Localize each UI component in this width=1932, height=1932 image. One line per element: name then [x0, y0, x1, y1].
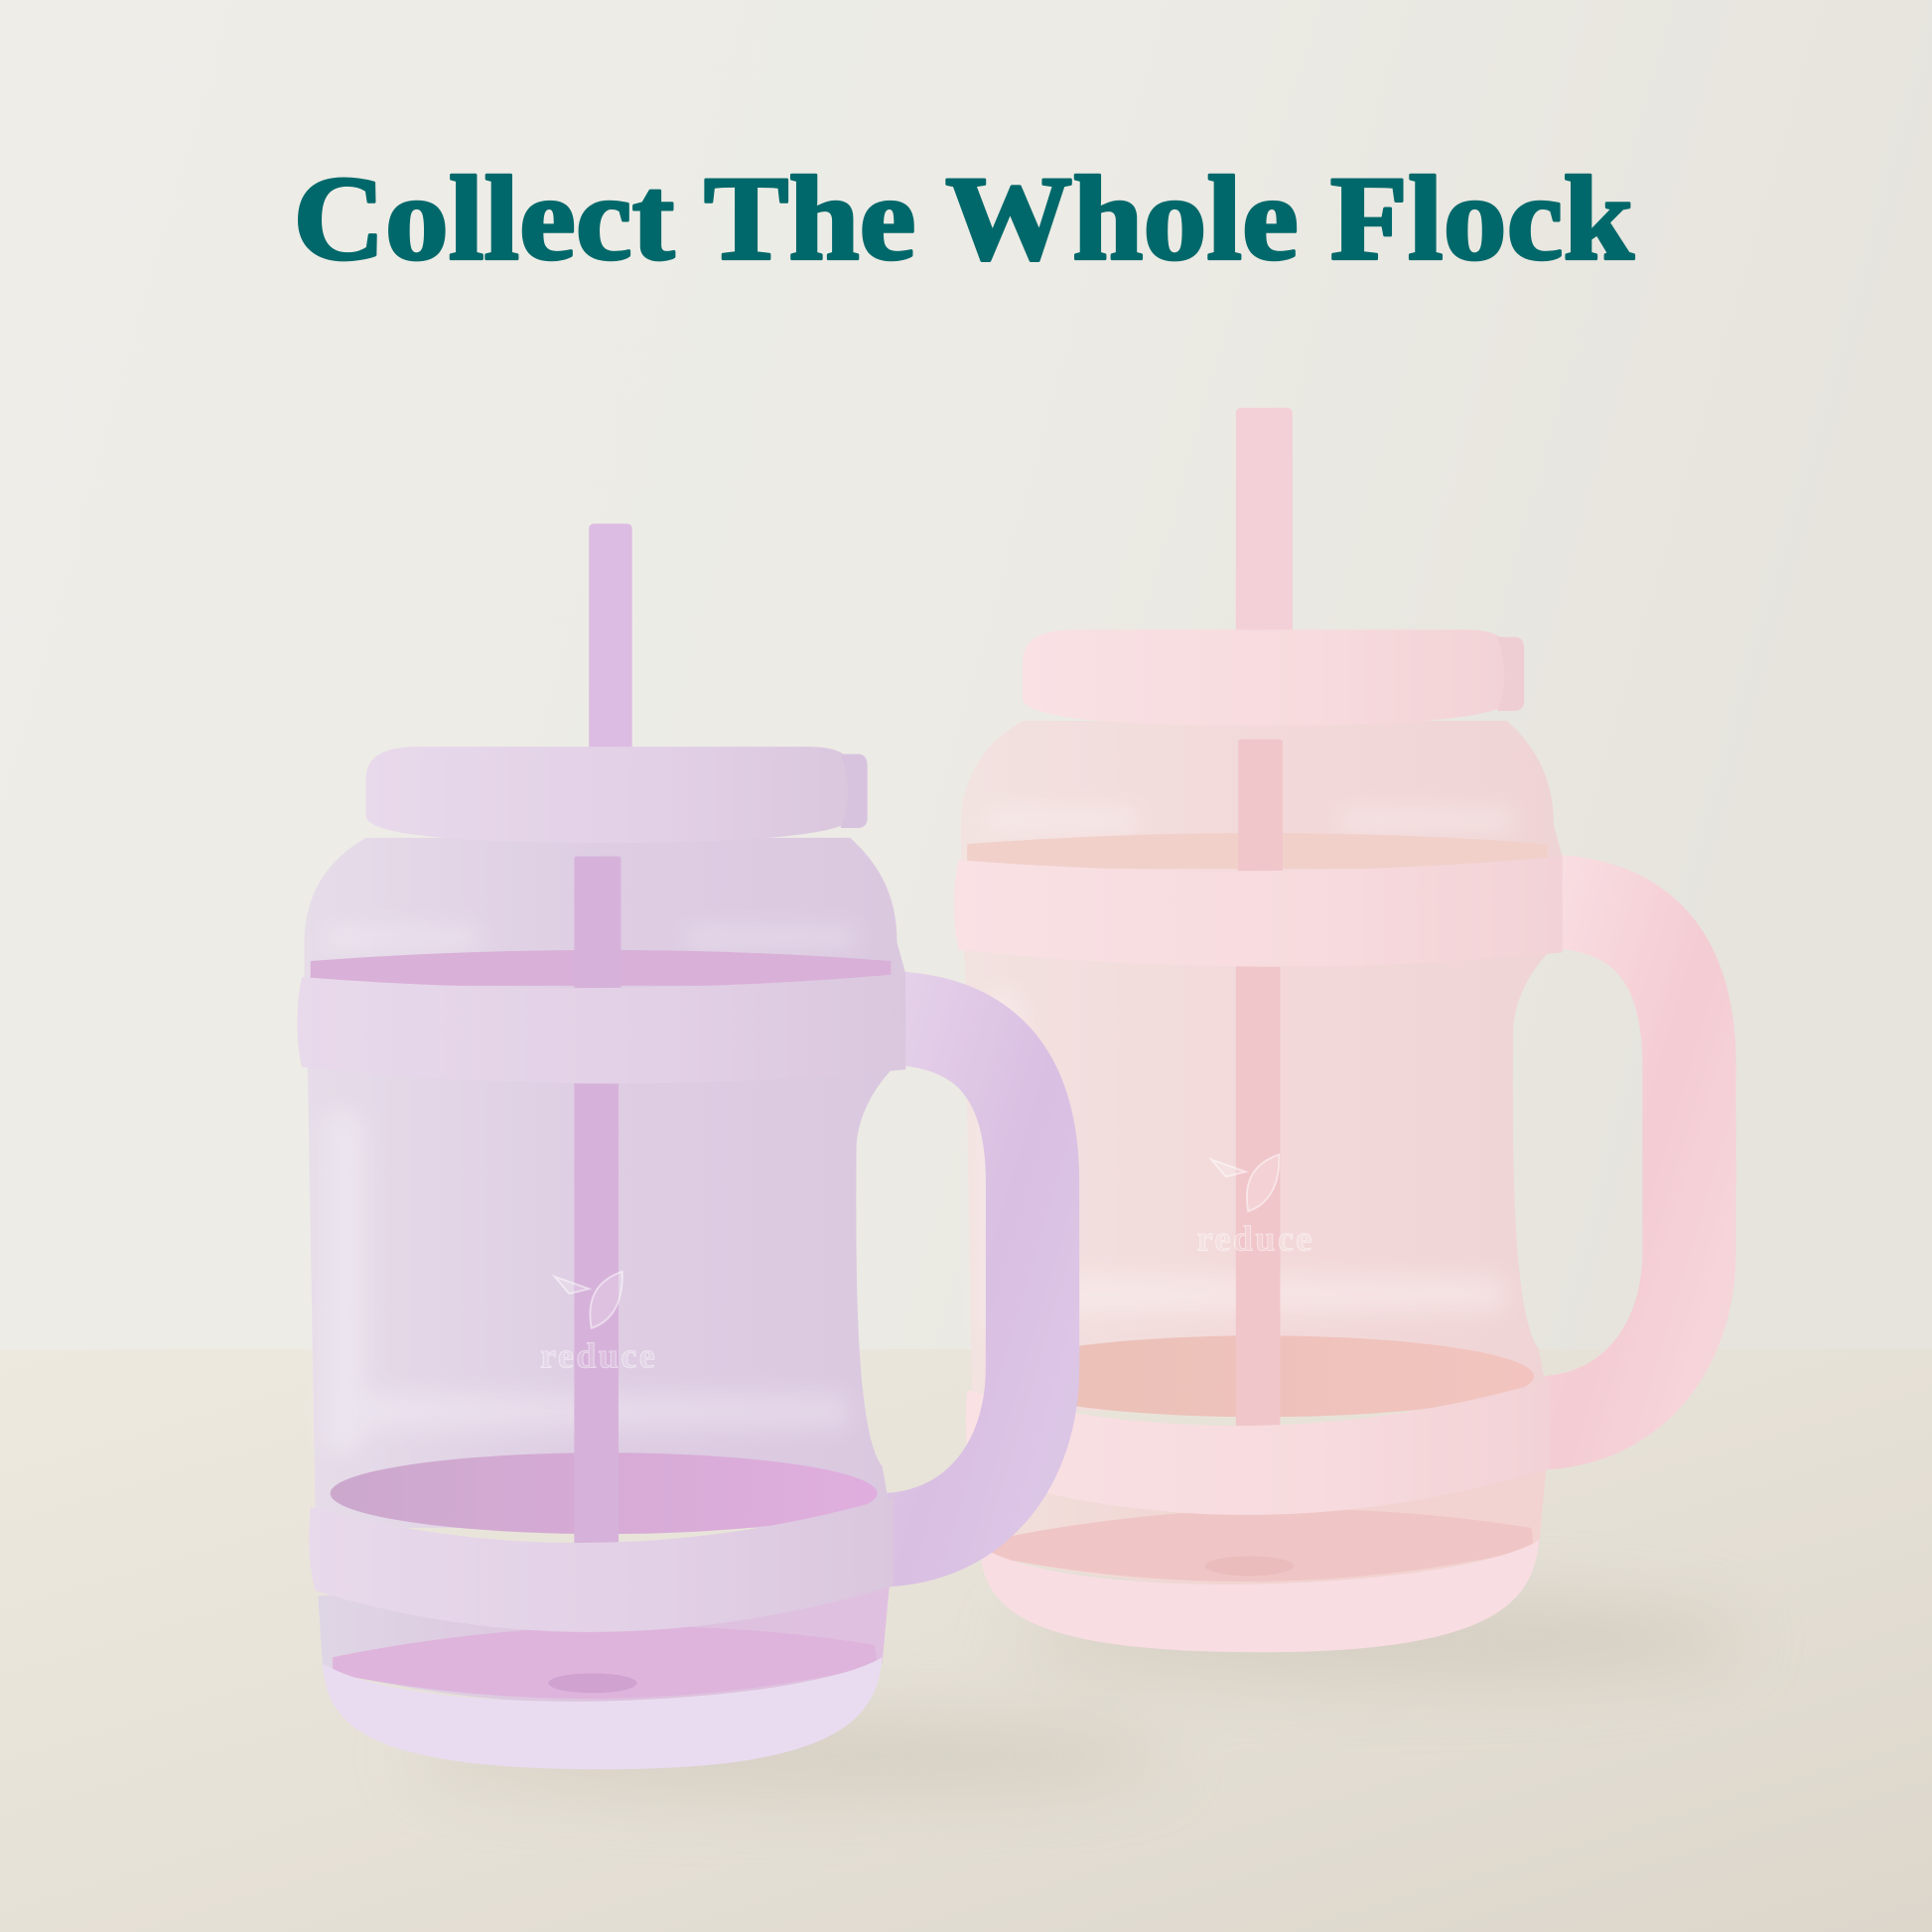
lilac base nub [548, 1673, 637, 1693]
lilac base glass [318, 1584, 890, 1704]
pink base floor tint [990, 1509, 1534, 1582]
lilac glass highlights [323, 926, 857, 1453]
cast shadows [407, 1595, 1749, 1795]
pink glass highlights [980, 809, 1513, 1337]
lilac base floor tint [333, 1626, 878, 1699]
pink foot [980, 1540, 1539, 1652]
embossed wordmark: reduce [1197, 1219, 1314, 1259]
lilac lower band [309, 1497, 894, 1632]
pink straw inside jug [1236, 740, 1283, 1555]
lilac lid tab [840, 755, 868, 828]
pink base nub [1205, 1556, 1294, 1576]
pink lower band [966, 1380, 1550, 1515]
embossed wordmark: reduce [540, 1336, 657, 1376]
pink straw above lid [1236, 408, 1293, 642]
pink shoulder rim [967, 833, 1548, 869]
pink jug [954, 408, 1690, 1652]
lilac foot [323, 1657, 883, 1769]
lilac straw above lid [589, 523, 632, 758]
lilac interior floor [331, 1452, 878, 1534]
title: Collect The Whole Flock [293, 153, 1634, 286]
lilac straw inside jug [574, 857, 621, 1672]
lilac lid [366, 747, 853, 843]
lilac glass body [305, 838, 905, 1528]
tabletop surface [0, 1349, 1932, 1932]
pink interior floor [987, 1335, 1534, 1417]
pink embossed logo [1197, 1155, 1314, 1259]
pink base glass [975, 1466, 1547, 1587]
icon: leaf logo [554, 1272, 622, 1328]
lilac jug [297, 523, 1033, 1769]
pink handle [1534, 900, 1690, 1423]
icon: leaf logo [1211, 1155, 1279, 1211]
lilac embossed logo [540, 1272, 657, 1376]
pink lid tab [1497, 637, 1524, 711]
pink lid [1023, 629, 1509, 726]
pink glass body [961, 721, 1563, 1411]
background wall [0, 0, 1932, 1351]
pink upper band [954, 857, 1563, 967]
lilac shoulder rim [311, 950, 891, 986]
lilac upper band [297, 973, 905, 1084]
lilac handle [878, 1018, 1033, 1540]
